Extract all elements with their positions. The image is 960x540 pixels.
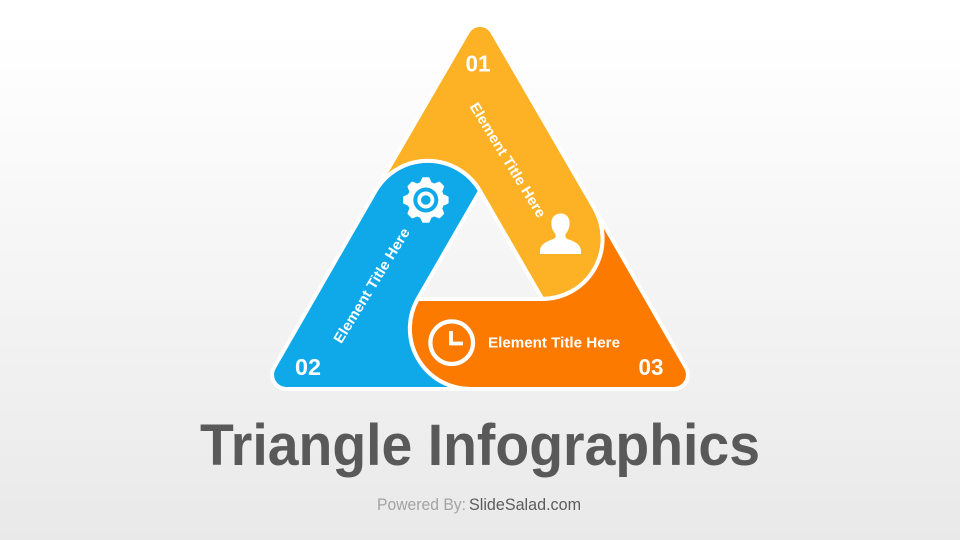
- triangle diagram: [272, 25, 688, 389]
- title: Triangle Infographics: [200, 413, 760, 478]
- number 03: 03: [638, 354, 664, 380]
- icon: gear: [404, 178, 447, 222]
- credit line: SlideSalad.com: [469, 496, 581, 514]
- number 01: 01: [466, 50, 491, 76]
- icon: person: [540, 214, 581, 254]
- credit line: Powered By:: [377, 496, 466, 514]
- icon: clock: [430, 321, 473, 364]
- segment 03: orange band: [410, 208, 688, 389]
- segment 01: yellow band: [376, 25, 603, 299]
- number 02: 02: [295, 354, 321, 380]
- label: orange element title: Element Title Here: [488, 334, 620, 352]
- label: blue element title: Element Title Here: [331, 226, 414, 346]
- label: yellow element title: Element Title Here: [466, 100, 548, 221]
- segment 02: blue band: [272, 161, 480, 389]
